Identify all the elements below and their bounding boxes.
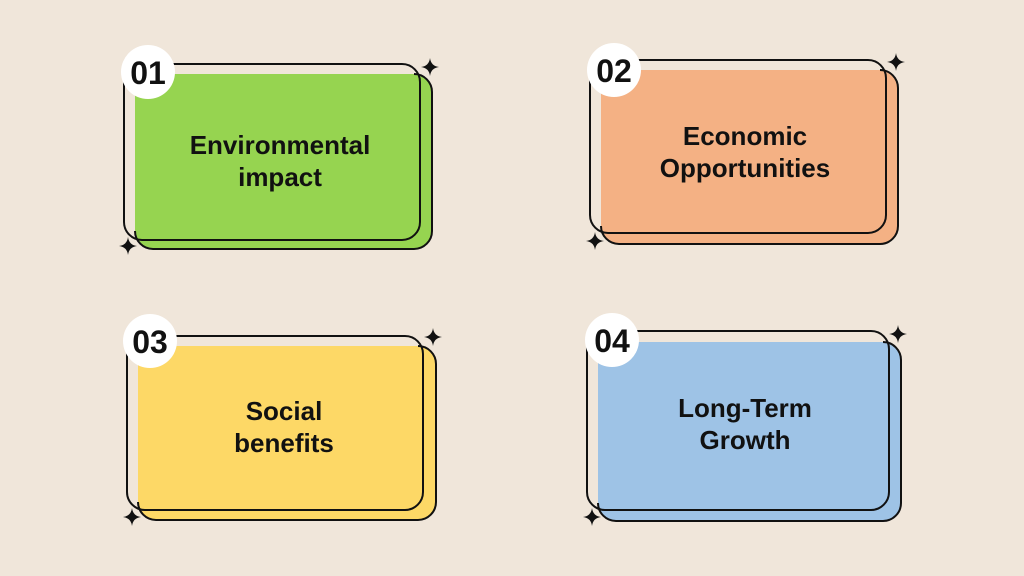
number badge 04: 04	[594, 323, 630, 359]
card text: benefits	[234, 428, 334, 458]
card text: Economic	[683, 121, 807, 151]
card fill: yellow	[138, 346, 436, 520]
card text: Opportunities	[660, 153, 830, 183]
number badge 03: 03	[132, 324, 168, 360]
card text: Long-Term	[678, 393, 812, 423]
card outline	[587, 331, 889, 510]
number badge 02: 02	[596, 53, 632, 89]
card: Social benefits	[123, 314, 442, 526]
card outline	[124, 64, 420, 240]
number badge 04	[585, 313, 639, 367]
sparkle icons	[119, 58, 439, 255]
card fill: green	[135, 74, 432, 249]
card text: Environmental	[190, 130, 370, 160]
sparkle icons	[583, 325, 907, 526]
number badge 03	[123, 314, 177, 368]
number badge 01	[121, 45, 175, 99]
card: Economic Opportunities	[586, 43, 905, 250]
card fill: blue	[598, 342, 901, 521]
card text: Growth	[700, 425, 790, 455]
number badge 01: 01	[130, 55, 166, 91]
number badge 02	[587, 43, 641, 97]
card fill: orange	[601, 70, 898, 244]
card outline	[127, 336, 423, 510]
card: Long-Term Growth	[583, 313, 907, 526]
card text: Social	[246, 396, 322, 426]
card: Environmental impact	[119, 45, 439, 255]
card outline	[590, 60, 886, 233]
card text: impact	[238, 162, 322, 192]
sparkle icons	[123, 328, 442, 526]
sparkle icons	[586, 53, 905, 250]
